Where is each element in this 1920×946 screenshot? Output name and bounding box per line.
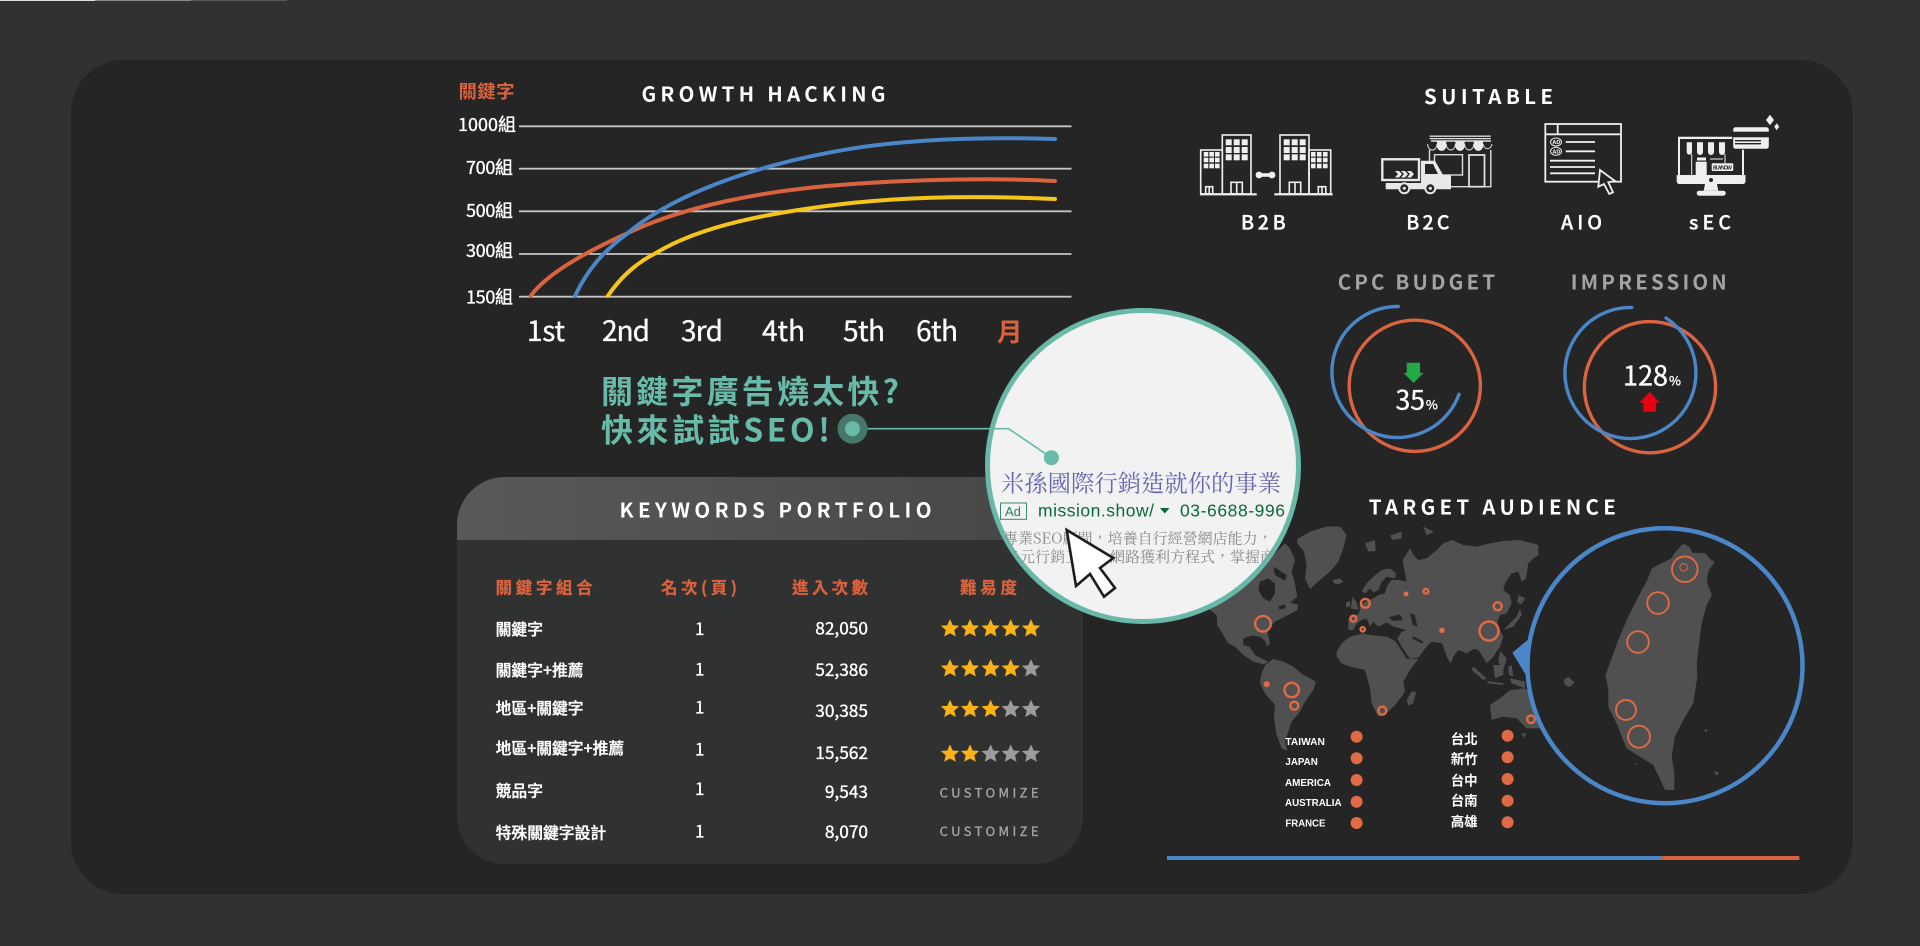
legend: cities: [1451, 728, 1514, 831]
suitable labels: B2B: [1241, 206, 1286, 236]
icon: cursor: [1067, 530, 1115, 597]
rank column: [695, 615, 704, 842]
ad description: 專業SEO顧問，培養自行經營網店能力，: [1003, 528, 1273, 548]
eurasia: [1348, 540, 1538, 663]
y axis labels: 150組: [466, 284, 513, 310]
legend: cities: 新竹: [1451, 748, 1478, 768]
arctic islands and uk: [1351, 597, 1358, 610]
madagascar: [1407, 692, 1416, 706]
icon: red up arrow: [1639, 392, 1660, 412]
magnifier: search ad preview: Ad: [1005, 504, 1021, 519]
row labels: 特殊關鍵字設計: [496, 820, 606, 844]
heading: SEO prompt: [601, 367, 899, 452]
legend: countries: FRANCE: [1285, 818, 1325, 830]
bottom progress line: [1167, 856, 1800, 860]
curves: [531, 138, 1055, 296]
visits column: 15,562: [815, 739, 868, 764]
CPC ring gauge: [1332, 306, 1480, 451]
visits column: 52,386: [815, 656, 868, 681]
x axis labels: 4th: [762, 310, 805, 350]
visits column: 9,543: [825, 778, 868, 803]
row labels: 地區+關鍵字+推薦: [496, 736, 624, 759]
table header bar: [457, 477, 1083, 540]
ad badge: [1000, 503, 1026, 519]
row labels: [496, 617, 624, 844]
rank column: 1: [695, 615, 704, 640]
taiwan markers: [1616, 556, 1698, 748]
grid lines: [519, 126, 1072, 297]
row labels: 關鍵字+推薦: [496, 658, 584, 681]
magnifier: search ad preview: 多元行銷工具、網路獲利方程式，掌握商機: [1005, 546, 1291, 567]
legend: countries: TAIWAN: [1285, 736, 1325, 748]
rank column: 1: [695, 736, 704, 760]
magnifier: search ad preview: [988, 310, 1298, 622]
north america: [1210, 522, 1298, 664]
icon: sEC monitor and card: BUY NOW: [1713, 166, 1733, 172]
column headings: [496, 574, 1018, 598]
column headings: 難易度: [960, 574, 1018, 598]
panel: target audience: [1167, 490, 1802, 860]
suitable labels: sEC: [1689, 206, 1731, 236]
suitable labels: AIO: [1561, 206, 1602, 236]
panel: CPC budget: [1332, 266, 1495, 451]
taiwan map: [1564, 545, 1719, 789]
suitable labels: [1241, 206, 1731, 236]
legend: cities: 高雄: [1451, 811, 1478, 831]
iceland: [1333, 578, 1343, 584]
indonesia: [1472, 667, 1487, 680]
heading: SEO prompt: 關鍵字廣告燒太快?: [601, 367, 899, 413]
icon: B2B buildings: [1200, 135, 1333, 194]
visits column: [815, 614, 868, 843]
chart title: GROWTH HACKING: [642, 78, 886, 108]
panel: growth hacking chart: [458, 78, 1072, 350]
CPC heading: CPC BUDGET: [1338, 266, 1495, 296]
icon: B2C store and truck: [1382, 136, 1492, 193]
japan and philippines: [1503, 608, 1522, 630]
x axis labels: 3rd: [681, 310, 723, 350]
y axis labels: 700組: [466, 154, 513, 180]
panel: suitable: [1200, 80, 1779, 236]
legend: countries: AMERICA: [1285, 777, 1331, 789]
y axis labels: 500組: [466, 197, 513, 223]
column headings: 關鍵字組合: [496, 574, 593, 598]
x axis labels: 2nd: [602, 310, 650, 350]
customize labels: CUSTOMIZE: [940, 821, 1039, 840]
map markers: [1255, 589, 1535, 723]
ad title: 米孫國際行銷造就你的事業: [1001, 464, 1283, 498]
impression value: 128%: [1623, 354, 1681, 394]
ad phone: 03-6688-996: [1180, 500, 1285, 520]
rank column: 1: [695, 775, 704, 800]
column headings: 名次(頁): [661, 574, 737, 598]
x axis labels: 1st: [527, 310, 565, 350]
panel: keywords portfolio: [457, 477, 1083, 864]
y axis labels: 300組: [466, 237, 513, 263]
difficulty stars: [941, 619, 1040, 762]
row labels: 競品字: [496, 778, 543, 802]
x axis labels: [527, 310, 958, 350]
legend: cities: 台中: [1451, 770, 1478, 790]
y axis labels: 1000組: [458, 111, 516, 137]
rank column: 1: [695, 818, 704, 842]
impression ring gauge: [1565, 307, 1716, 453]
suitable heading: SUITABLE: [1424, 80, 1553, 110]
customize labels: [940, 782, 1039, 840]
greenland: [1297, 527, 1347, 589]
suitable labels: B2C: [1406, 206, 1450, 236]
CPC value: 35%: [1396, 378, 1438, 418]
australia: [1490, 688, 1540, 728]
y axis labels: [458, 111, 516, 310]
visits column: 82,050: [815, 614, 868, 640]
inland seas: [1388, 613, 1423, 644]
target heading: TARGET AUDIENCE: [1369, 490, 1616, 520]
icon: green down arrow: [1404, 363, 1424, 383]
icon: AIO ad window: [1545, 124, 1621, 194]
row labels: 關鍵字: [496, 617, 543, 640]
rank column: 1: [695, 694, 704, 718]
ad url: mission.show/: [1038, 500, 1154, 520]
icon: sEC monitor and card: [1677, 115, 1779, 196]
hudson bay and channels: [1258, 567, 1287, 609]
legend: cities: 台北: [1451, 728, 1478, 748]
visits column: 8,070: [825, 818, 868, 843]
panel: impression: [1565, 266, 1727, 453]
scandinavia: [1362, 568, 1396, 593]
y axis title: 關鍵字: [458, 78, 514, 104]
south america: [1260, 659, 1316, 751]
taiwan magnifier circle: [1528, 528, 1802, 803]
connector line from heading to ad: [838, 414, 1059, 465]
heading: SEO prompt: 快來試試SEO!: [601, 406, 830, 452]
impression heading: IMPRESSION: [1571, 266, 1727, 296]
row labels: 地區+關鍵字: [496, 696, 584, 719]
icon: AIO ad window: AD: [1552, 140, 1560, 146]
column headings: 進入次數: [792, 574, 868, 598]
callout pointer: [1512, 638, 1530, 682]
africa: [1337, 633, 1418, 717]
rank column: 1: [695, 656, 704, 680]
customize labels: CUSTOMIZE: [940, 782, 1039, 802]
legend: countries: [1285, 731, 1363, 830]
icon: AIO ad window: AD: [1552, 149, 1560, 155]
x axis unit: 月: [997, 312, 1023, 349]
x axis labels: 6th: [916, 310, 958, 350]
legend: countries: JAPAN: [1285, 756, 1318, 768]
visits column: 30,385: [815, 697, 868, 722]
table title: KEYWORDS PORTFOLIO: [620, 494, 932, 524]
x axis labels: 5th: [843, 310, 885, 350]
world map: [1210, 522, 1540, 751]
legend: countries: AUSTRALIA: [1285, 797, 1342, 809]
legend: cities: 台南: [1451, 790, 1478, 810]
